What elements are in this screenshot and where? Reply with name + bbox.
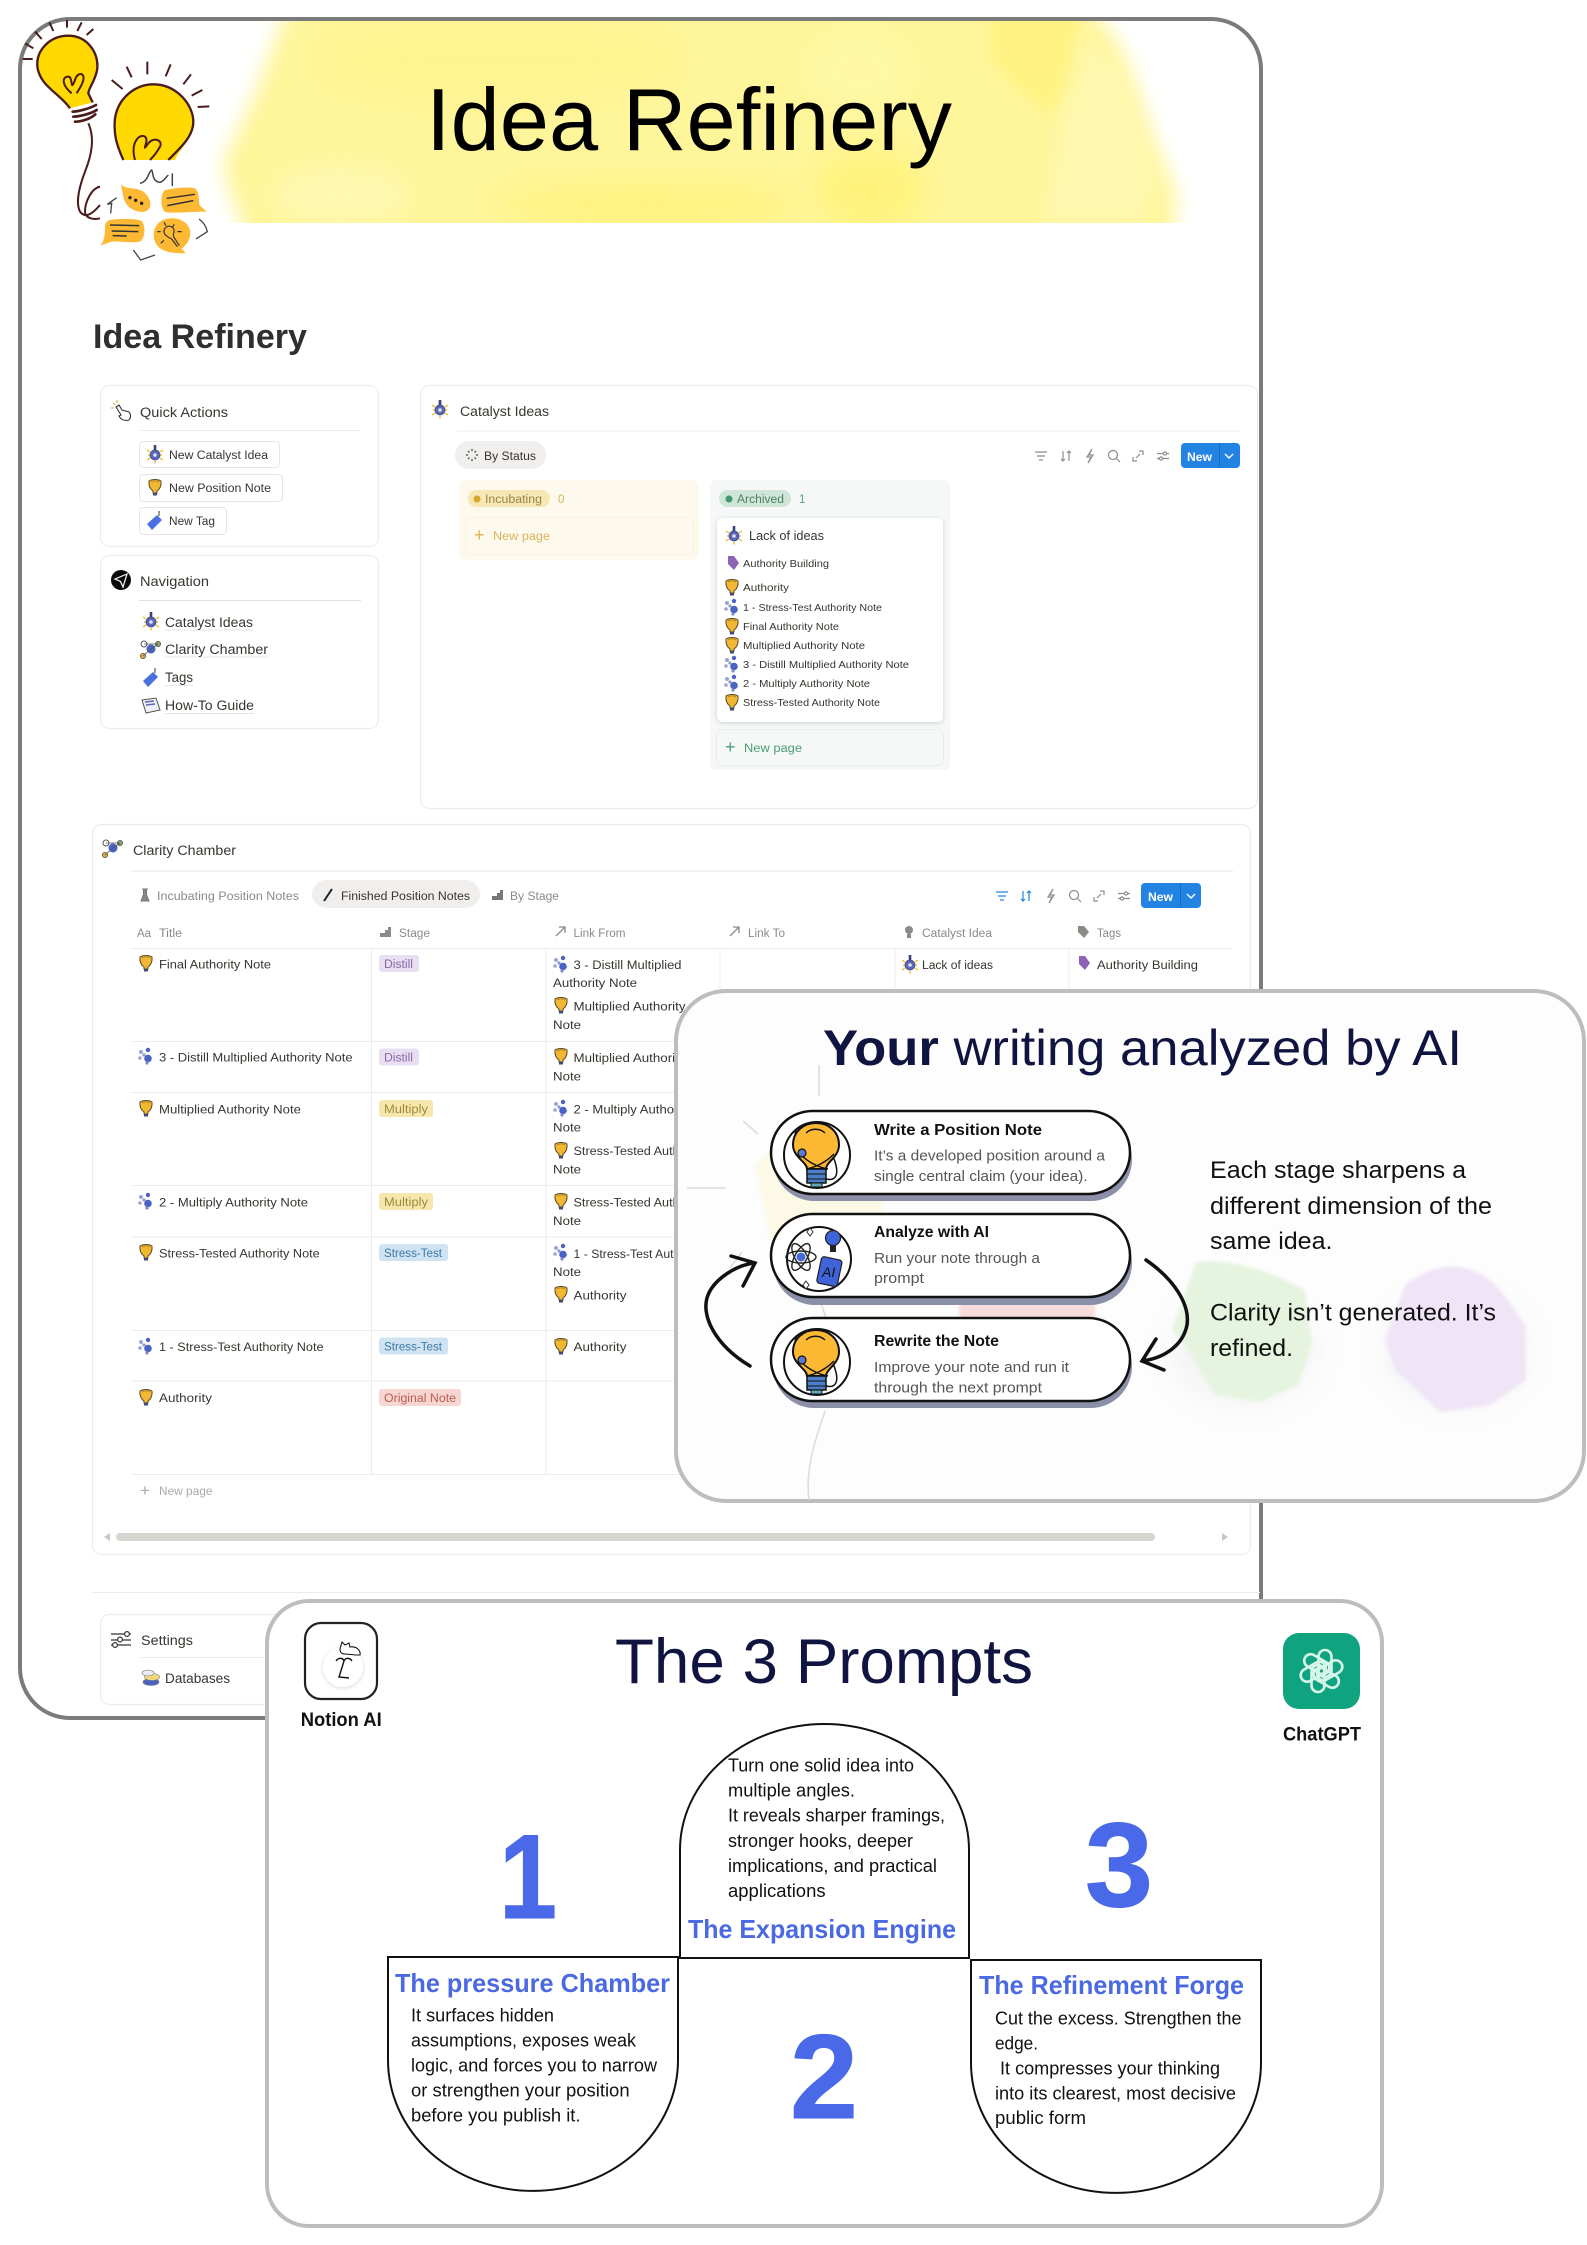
- text: clarity chamber heading: Clarity Chamber: [133, 843, 237, 858]
- link: catalyst ideas: Catalyst Ideas: [165, 615, 253, 630]
- link: tags: [143, 668, 193, 687]
- column: incubating: New page: [493, 531, 550, 543]
- table row: final authority note: Distill: [384, 959, 413, 971]
- shape: the refinement forge bowl: It compresses your thinking: [1000, 2058, 1220, 2078]
- table row: stress-tested authority note: Authority: [574, 1291, 627, 1303]
- text: each stage sharpens: Each stage sharpens a: [1210, 1157, 1467, 1184]
- shape: the expansion engine dome: It reveals sharper framings,: [728, 1806, 945, 1826]
- table row: 1 - stress-test: 1 - Stress-Test Authority Note: [159, 1342, 324, 1354]
- button: new position note: New Position Note: [169, 483, 271, 495]
- icon: notion AI: [301, 1623, 382, 1731]
- text: each stage sharpens: [1210, 1157, 1492, 1255]
- title: Idea Refinery banner: Idea Refinery: [426, 70, 952, 169]
- link: catalyst ideas: [143, 612, 253, 630]
- shape: the refinement forge bowl: [971, 1960, 1261, 2193]
- shape: the expansion engine dome: [680, 1724, 969, 1958]
- shape: the refinement forge bowl: edge.: [995, 2034, 1038, 2054]
- table row: 3 - distill: 3 - Distill Multiplied Authority Note: [159, 1053, 353, 1065]
- table row: authority: [140, 1389, 461, 1406]
- icon: atom, bulb and AI tablet: [786, 1227, 851, 1291]
- table row: final authority note: [140, 955, 1198, 1032]
- table row: final authority note: Authority Building: [1097, 960, 1198, 972]
- tab: by stage: By Stage: [510, 891, 559, 903]
- card: lack of ideas: 1 - Stress-Test Authority Note: [743, 603, 882, 614]
- tab: by stage: [492, 890, 559, 903]
- icon: right bulb: [112, 62, 209, 160]
- heading: Idea Refinery page: Idea Refinery: [93, 318, 307, 356]
- column: archived: New page: [744, 743, 802, 755]
- table row: final authority note: Lack of ideas: [922, 960, 993, 972]
- table row: final authority note: Multiplied Authority: [574, 1002, 686, 1014]
- icon: ChatGPT: [1283, 1633, 1361, 1746]
- icon: catalyst flask: [432, 400, 448, 418]
- table row: multiplied authority note: Note: [553, 1122, 581, 1134]
- panel: navigation: [100, 556, 378, 728]
- table row: 3 - distill: Note: [553, 1072, 581, 1084]
- shape: the expansion engine dome: stronger hooks, deeper: [728, 1831, 913, 1851]
- button: new position note: [140, 474, 282, 502]
- table row: multiplied authority note: Note: [553, 1164, 581, 1176]
- table row: 2 - multiply: Stress-Tested Authority: [574, 1198, 704, 1210]
- column: archived: [710, 480, 950, 770]
- column: archived: 1: [799, 494, 805, 506]
- table row: 1 - stress-test: [138, 1338, 627, 1355]
- button: new catalyst idea: New Catalyst Idea: [169, 450, 269, 462]
- panel: the 3 prompts: [267, 1601, 1382, 2226]
- table row: final authority note: Final Authority Note: [159, 960, 271, 972]
- number: 3: 3: [1085, 1798, 1153, 1932]
- button: new tag: [140, 508, 226, 534]
- step: rewrite the note: through the next prompt: [874, 1380, 1043, 1396]
- button: new tag: New Tag: [169, 516, 215, 528]
- text: navigation heading: Navigation: [140, 574, 209, 589]
- panel: clarity chamber table: [92, 824, 1250, 1554]
- card: lack of ideas: Multiplied Authority Note: [743, 641, 865, 652]
- text: clarity isn't generated: [1210, 1300, 1496, 1362]
- tab: by status: By Status: [484, 451, 536, 463]
- table row: 1 - stress-test: Authority: [574, 1342, 627, 1354]
- step: rewrite the note: [771, 1318, 1132, 1408]
- table row: final authority note: 3 - Distill Multiplied: [574, 960, 682, 972]
- button: new: [1141, 883, 1201, 908]
- number: 2: 2: [790, 2010, 858, 2144]
- icon: atom, bulb and AI tablet: AI: [821, 1264, 835, 1280]
- step: write a position note: single central claim (your idea).: [874, 1168, 1088, 1185]
- table header row: Title: [159, 928, 182, 940]
- toolbar: table view icons: [996, 889, 1130, 903]
- card: lack of ideas: Authority: [743, 583, 790, 594]
- button: new: [1181, 443, 1240, 468]
- panel: catalyst ideas board: [420, 386, 1258, 808]
- step: analyze with AI: [771, 1214, 1132, 1305]
- panel: your writing analyzed by AI: [676, 991, 1584, 1501]
- panel: quick actions: [100, 386, 378, 546]
- table header row: Stage: [399, 928, 430, 940]
- shape: the refinement forge bowl: public form: [995, 2108, 1086, 2128]
- table header row: Tags: [1097, 928, 1121, 940]
- card: lack of ideas: Stress-Tested Authority Note: [743, 698, 880, 709]
- table: new page row: +: [140, 1481, 150, 1500]
- column: archived: +: [725, 737, 736, 757]
- panel: main Notion page frame: [20, 19, 1261, 1718]
- shape: the pressure chamber bowl: assumptions, exposes weak: [411, 2030, 637, 2050]
- shape: the pressure chamber bowl: It surfaces hidden: [411, 2006, 554, 2026]
- table: new page row: [140, 1481, 212, 1500]
- icon: clarity chamber network: [102, 840, 123, 858]
- column: incubating: [459, 480, 699, 560]
- table row: stress-tested authority note: Note: [553, 1267, 581, 1279]
- table row: final authority note: Authority Note: [553, 978, 637, 990]
- link: tags: Tags: [165, 670, 193, 685]
- toolbar: view icons: [1035, 449, 1169, 463]
- step: write a position note: Write a Position Note: [874, 1122, 1042, 1139]
- table row: 3 - distill: Multiplied Authority: [574, 1053, 686, 1065]
- table row: final authority note: Note: [553, 1020, 581, 1032]
- step: rewrite the note: Improve your note and run it: [874, 1359, 1070, 1376]
- text: clarity isn't generated: Clarity isn’t generated. It’s: [1210, 1300, 1496, 1326]
- icon: black paper plane: [111, 570, 131, 590]
- table row: stress-tested authority note: Stress-Tested Authority Note: [159, 1248, 320, 1260]
- shape: the pressure chamber bowl: before you publish it.: [411, 2106, 580, 2126]
- table header row: Aa: [137, 928, 152, 940]
- shape: the pressure chamber bowl: or strengthen your position: [411, 2080, 630, 2100]
- icon: settings sliders: [111, 1632, 131, 1647]
- table row: multiplied authority note: 2 - Multiply Authority: [574, 1104, 692, 1116]
- table header row: Link To: [748, 928, 785, 940]
- button: new: New: [1187, 450, 1213, 464]
- text: each stage sharpens: same idea.: [1210, 1228, 1332, 1255]
- column: incubating: +: [474, 525, 485, 545]
- tab: finished position notes: [312, 880, 480, 908]
- arrow: loop back up: [706, 1256, 755, 1366]
- main frame outline: [20, 19, 1261, 1718]
- number: 1: 1: [499, 1810, 557, 1944]
- card: lack of ideas: Lack of ideas: [749, 529, 824, 543]
- table row: multiplied authority note: Multiplied Authority Note: [159, 1104, 301, 1116]
- shape: the expansion engine dome: The Expansion Engine: [688, 1914, 956, 1944]
- panel: settings: [100, 1614, 378, 1704]
- title: the 3 prompts: The 3 Prompts: [615, 1627, 1033, 1697]
- column: incubating: Incubating: [485, 494, 542, 506]
- shape: the pressure chamber bowl: The pressure Chamber: [395, 1968, 670, 1998]
- text: settings heading: Settings: [141, 1633, 193, 1648]
- card: lack of ideas: Final Authority Note: [743, 622, 839, 633]
- table: new page row: New page: [159, 1486, 212, 1498]
- shape: the refinement forge bowl: into its clearest, most decisive: [995, 2084, 1236, 2104]
- table row: 2 - multiply: 2 - Multiply Authority Note: [159, 1198, 308, 1210]
- shape: the expansion engine dome: multiple angles.: [728, 1781, 855, 1801]
- step: analyze with AI: Analyze with AI: [874, 1224, 989, 1241]
- icon: speech bubbles: [100, 170, 207, 260]
- table row: authority: Original Note: [384, 1393, 456, 1405]
- card: lack of ideas: 3 - Distill Multiplied Authority Note: [743, 660, 909, 671]
- card: lack of ideas: 2 - Multiply Authority Note: [743, 679, 870, 690]
- shape: the expansion engine dome: Turn one solid idea into: [728, 1756, 914, 1776]
- table: horizontal scrollbar: [104, 1533, 1228, 1541]
- icon: databases stack: [142, 1670, 160, 1686]
- card: lack of ideas: [717, 518, 943, 722]
- column: incubating: 0: [558, 494, 564, 506]
- table row: 3 - distill: Distill: [384, 1052, 413, 1064]
- table row: 2 - multiply: Note: [553, 1216, 581, 1228]
- card: lack of ideas: Authority Building: [743, 559, 829, 570]
- step: rewrite the note: Rewrite the Note: [874, 1333, 999, 1350]
- table header row: Catalyst Idea: [922, 928, 993, 940]
- arrow: loop down: [1142, 1260, 1187, 1370]
- icon: ChatGPT: ChatGPT: [1283, 1725, 1361, 1746]
- button: new catalyst idea: [140, 442, 280, 468]
- link: clarity chamber: Clarity Chamber: [165, 642, 269, 657]
- table row: 2 - multiply: [138, 1193, 704, 1228]
- icon: pointing hand: [111, 400, 130, 420]
- table header row: Link From: [574, 928, 626, 940]
- decoration: faint crumpled paper balls: [687, 1065, 1528, 1500]
- step: analyze with AI: prompt: [874, 1270, 925, 1287]
- table row: 2 - multiply: Multiply: [384, 1197, 428, 1209]
- step: analyze with AI: Run your note through a: [874, 1250, 1041, 1267]
- step: write a position note: [771, 1111, 1132, 1201]
- table header row: [137, 926, 1121, 940]
- shape: the refinement forge bowl: Cut the excess. Strengthen the: [995, 2008, 1242, 2028]
- link: how-to guide: How-To Guide: [165, 698, 254, 713]
- icon: light bulbs and speech bubbles illustration: [23, 20, 209, 260]
- table row: 3 - distill: [138, 1048, 686, 1084]
- table row: multiplied authority note: [140, 1100, 704, 1176]
- table row: 1 - stress-test: Stress-Test: [384, 1342, 443, 1354]
- table row: stress-tested authority note: [140, 1244, 704, 1303]
- tab: incubating position notes: Incubating Position Notes: [157, 891, 299, 903]
- text: quick actions heading: Quick Actions: [140, 405, 228, 420]
- text: clarity isn't generated: refined.: [1210, 1335, 1293, 1362]
- table row: stress-tested authority note: 1 - Stress-Test Authority: [574, 1249, 704, 1261]
- shape: the expansion engine dome: applications: [728, 1881, 826, 1901]
- title: your writing analyzed by AI: Your writing analyzed by AI: [823, 1020, 1462, 1076]
- button: new: New: [1148, 890, 1174, 904]
- banner: yellow watercolor wash: [211, 21, 1188, 223]
- column: archived: Archived: [737, 494, 784, 506]
- table row: multiplied authority note: Multiply: [384, 1104, 428, 1116]
- table row: multiplied authority note: Stress-Tested Authority: [574, 1146, 704, 1158]
- icon: left bulb: [23, 20, 100, 219]
- shape: the refinement forge bowl: The Refinement Forge: [979, 1970, 1244, 2000]
- text: databases link: Databases: [165, 1671, 230, 1686]
- table row: authority: Authority: [159, 1393, 212, 1405]
- icon: notion AI: Notion AI: [301, 1710, 382, 1731]
- link: clarity chamber: [140, 641, 269, 659]
- step: write a position note: It’s a developed position around a: [874, 1147, 1106, 1164]
- shape: the pressure chamber bowl: logic, and forces you to narrow: [411, 2056, 658, 2076]
- text: catalyst ideas heading: Catalyst Ideas: [460, 404, 549, 419]
- table row: stress-tested authority note: Stress-Test: [384, 1248, 443, 1260]
- shape: the expansion engine dome: implications, and practical: [728, 1856, 937, 1876]
- tab: by status: [455, 441, 546, 469]
- tab: finished position notes: Finished Position Notes: [341, 891, 470, 903]
- text: each stage sharpens: different dimension of the: [1210, 1193, 1492, 1220]
- shape: the pressure chamber bowl: [388, 1957, 678, 2191]
